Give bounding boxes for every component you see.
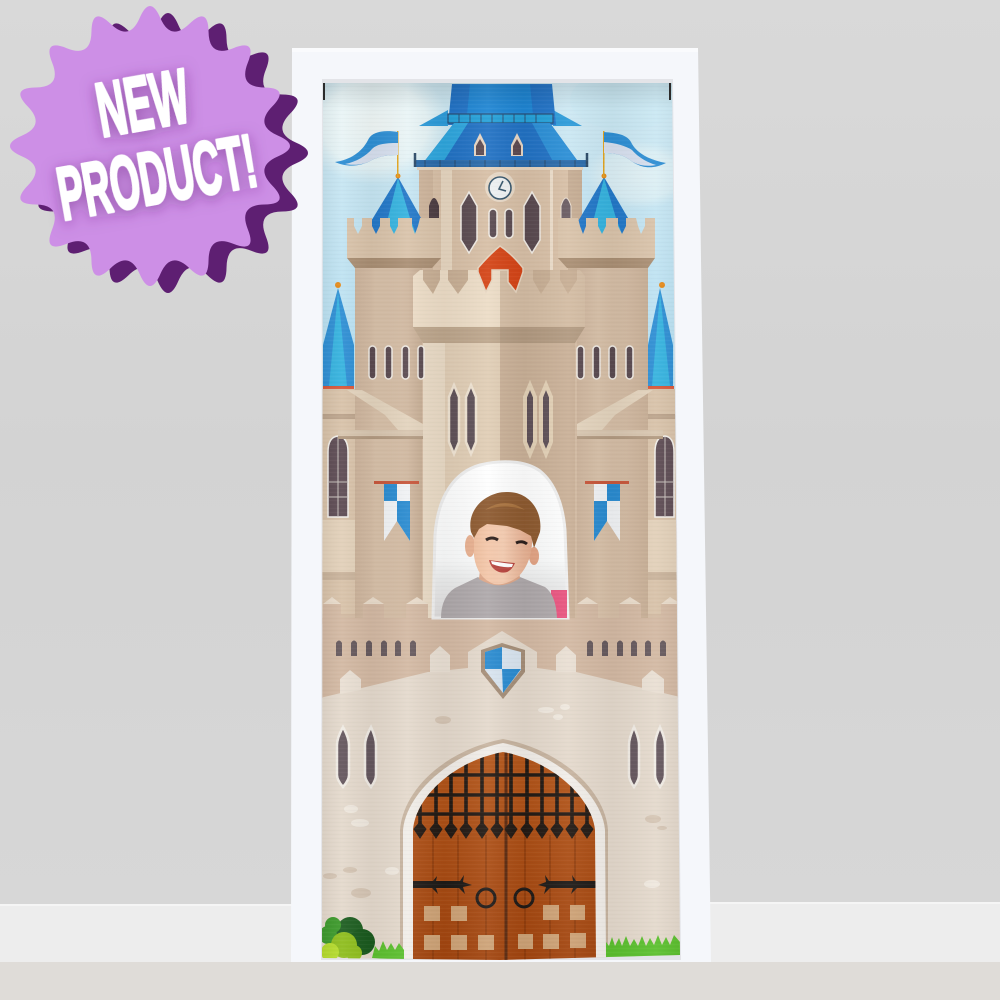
keep battlement notches	[423, 270, 577, 294]
roof dormers	[474, 133, 523, 156]
wall stones	[323, 716, 667, 898]
hair highlight	[485, 503, 525, 510]
door centre seam	[504, 752, 508, 960]
backing wall between towers	[320, 389, 685, 624]
eyes	[486, 538, 527, 544]
right pennant	[585, 481, 629, 541]
far right turret	[648, 282, 674, 389]
grass right	[606, 935, 680, 958]
arrow slits	[336, 640, 666, 656]
face	[474, 522, 532, 584]
gate	[400, 739, 608, 960]
curtain	[322, 83, 680, 960]
bush	[319, 917, 375, 961]
clock	[485, 172, 515, 202]
red door	[478, 246, 523, 292]
pink toy	[551, 590, 567, 618]
lower blue roof	[414, 123, 587, 167]
tower row windows	[369, 346, 633, 379]
baseboard	[0, 902, 1000, 962]
badge shadow star	[28, 13, 308, 293]
right side wing	[648, 389, 677, 602]
shirt	[441, 577, 557, 618]
far left turret	[323, 282, 354, 389]
rampart wall	[320, 597, 685, 698]
fabric texture and folds	[320, 80, 685, 965]
keep double windows left	[449, 385, 476, 454]
wall windows	[337, 727, 665, 787]
portcullis	[410, 752, 600, 838]
hair	[470, 492, 540, 548]
right arched window	[655, 436, 674, 517]
stairs and ledges	[338, 390, 663, 439]
left flag	[335, 131, 398, 177]
badge text NEW: NEW	[90, 53, 196, 154]
keep upper wall	[413, 270, 585, 623]
central tower	[417, 167, 583, 270]
left arched window	[328, 436, 348, 517]
left pennant	[374, 481, 419, 541]
right tower	[558, 218, 655, 618]
badge	[10, 6, 308, 293]
right turret cone	[578, 174, 628, 234]
keep double windows right	[525, 385, 551, 454]
neck	[479, 570, 520, 585]
curtain hooks	[323, 83, 671, 100]
right flag	[603, 131, 666, 177]
left side wing	[322, 389, 358, 614]
left tower	[347, 218, 441, 618]
shield	[481, 643, 525, 699]
door frame	[291, 48, 711, 962]
smile	[489, 560, 515, 573]
grass left	[372, 941, 404, 960]
window mullions	[328, 437, 674, 517]
left turret cone	[372, 174, 421, 234]
cut-out window with child	[433, 462, 568, 618]
upper blue roof	[419, 84, 582, 126]
hinge left	[413, 875, 472, 894]
crenel tips on lower wall	[340, 646, 664, 694]
ears	[465, 535, 475, 557]
badge text PRODUCT: PRODUCT!	[51, 118, 263, 236]
badge main star	[10, 6, 290, 286]
hinge right	[538, 875, 596, 894]
lower castle wall	[320, 631, 685, 960]
floor	[0, 962, 1000, 1000]
tower diamond windows	[461, 192, 540, 253]
door studs	[424, 905, 586, 950]
sky	[322, 83, 675, 389]
door planks	[433, 835, 575, 960]
door rings	[477, 889, 533, 907]
